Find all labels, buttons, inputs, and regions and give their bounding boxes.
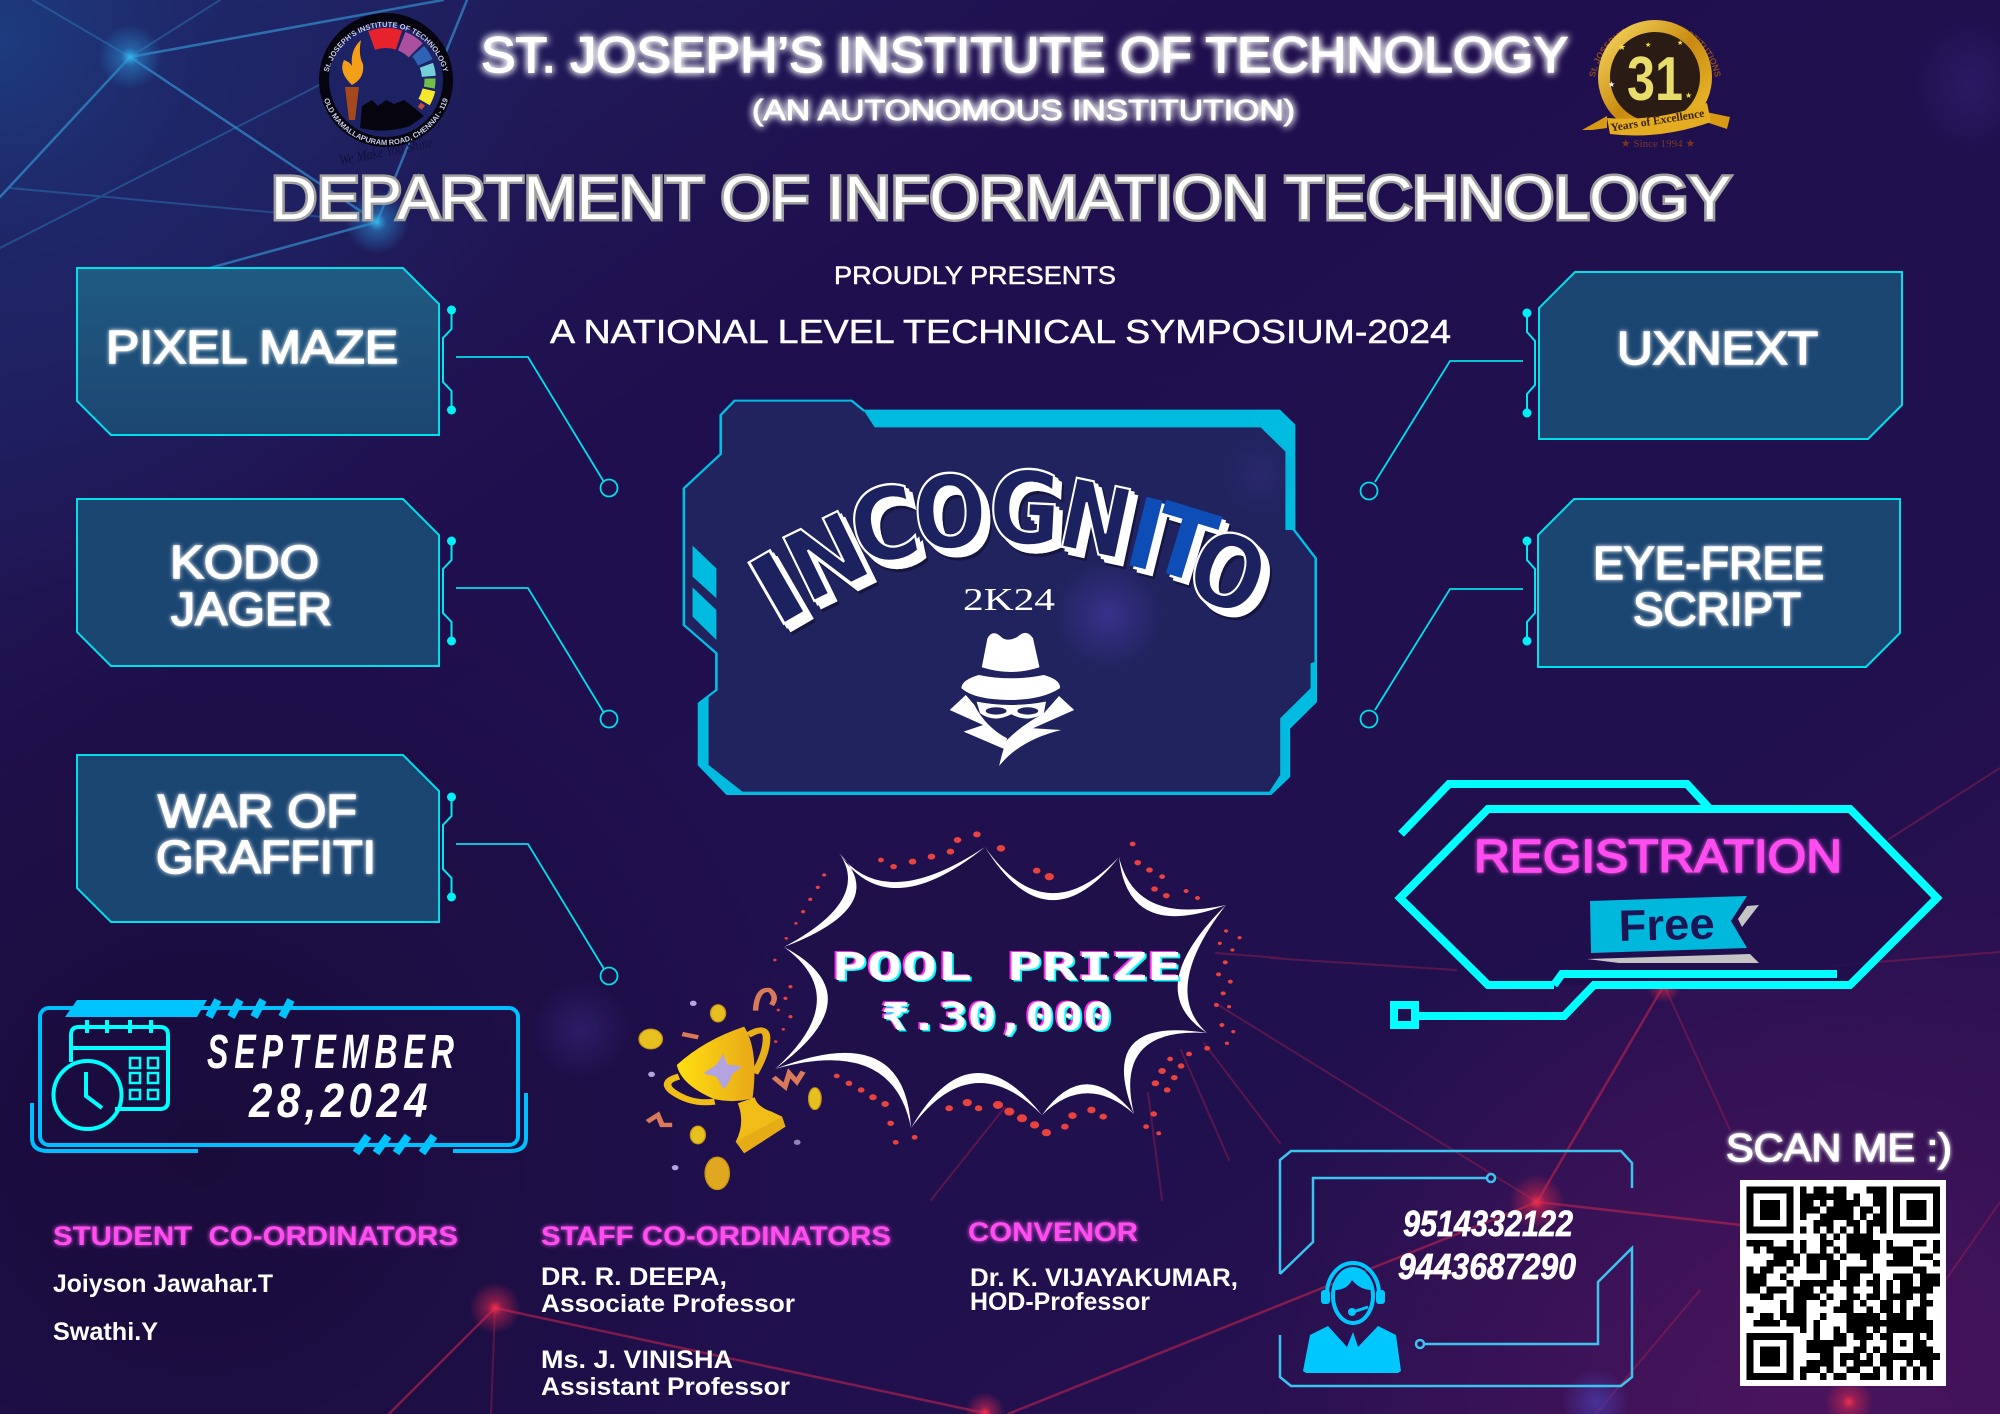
logo: 31 years badge: ★ (1685, 91, 1692, 100)
heading: scan me: SCAN ME :) (1726, 1127, 1952, 1170)
block: student co-ordinators: Swathi.Y (53, 1318, 158, 1346)
panel: Eye-Free Script: EYE-FREE (1593, 537, 1824, 589)
wordmark: INCOGNITO: C (839, 461, 930, 591)
panel: registration badge (1394, 784, 1937, 1025)
text: date month: SEPTEMBER (207, 1026, 460, 1079)
icon: spy with hat (950, 633, 1074, 766)
panel: pool prize burst (774, 832, 1241, 1144)
wordmark: INCOGNITO: N (768, 491, 886, 626)
text: prize amount: ₹.30,000 (881, 995, 1112, 1039)
block: student co-ordinators (53, 1221, 458, 1346)
ribbon: free (1587, 896, 1759, 963)
wordmark: INCOGNITO: G (986, 449, 1064, 570)
subtitle: autonomous institution: (AN AUTONOMOUS INSTITUTION) (752, 95, 1295, 127)
icon: calendar and clock (54, 1020, 168, 1129)
connector: Pixel Maze (456, 357, 618, 496)
block: convenor: HOD-Professor (970, 1288, 1150, 1316)
connector: Eye-Free Script (1360, 589, 1523, 728)
icon: trophy with coins (639, 990, 821, 1190)
heading: registration: REGISTRATION (1474, 830, 1842, 882)
panel: War of Graffiti (77, 755, 456, 922)
block: staff co-ordinators: Associate Professor (541, 1290, 795, 1318)
wordmark: INCOGNITO: N (1050, 458, 1141, 583)
panel: contact numbers (1280, 1151, 1632, 1386)
text: symposium line: A NATIONAL LEVEL TECHNICAL SYMPOSIUM-2024 (550, 313, 1451, 350)
panel: Kodo Jager: KODO (170, 536, 319, 588)
block: staff co-ordinators (541, 1221, 891, 1401)
block: convenor: Dr. K. VIJAYAKUMAR, (970, 1264, 1238, 1292)
title: institute name: ST. JOSEPH’S INSTITUTE OF TECHNOLOGY (481, 27, 1568, 83)
decorative dots (774, 832, 1241, 1144)
panel: War of Graffiti: WAR OF (158, 785, 357, 837)
logo: 31 years badge: ★ Since 1994 ★ (1621, 138, 1695, 150)
block: staff co-ordinators: DR. R. DEEPA, (541, 1263, 727, 1291)
wordmark: INCOGNITO: I (729, 528, 827, 649)
block: student co-ordinators: STUDENT CO-ORDINATORS (53, 1221, 458, 1251)
panel: event date (32, 1000, 526, 1153)
logo: 31 years badge: ★ (1618, 42, 1626, 52)
connector: Kodo Jager (456, 588, 618, 728)
burst fill (775, 847, 1226, 1128)
wordmark: INCOGNITO: O (911, 454, 989, 574)
logo: 31 years badge: ★ (1677, 39, 1683, 47)
panel: War of Graffiti: GRAFFITI (156, 831, 376, 883)
panel: UXNext: UXNEXT (1617, 322, 1818, 374)
block: staff co-ordinators: Assistant Professor (541, 1373, 790, 1401)
connector: War of Graffiti (456, 844, 618, 984)
date frame (32, 1000, 526, 1153)
icon: support agent (1303, 1263, 1401, 1373)
panel: Pixel Maze (77, 268, 456, 435)
contact frame (1280, 1151, 1632, 1386)
logo: 31 years badge: Years of Excellence (1610, 108, 1705, 134)
logo: St. Joseph's Institute emblem: We Make You Shine (338, 135, 435, 169)
logo: St. Joseph's Institute emblem: OLD MAMALLAPURAM ROAD, CHENNAI - 119 (324, 98, 448, 145)
panel: Pixel Maze: PIXEL MAZE (106, 321, 398, 373)
logo: St. Joseph's Institute emblem: St. JOSEPH'S INSTITUTE OF TECHNOLOGY (324, 22, 448, 72)
text: 2K24: 2K24 (963, 581, 1055, 617)
panel: UXNext (1522, 272, 1902, 439)
ribbon: free: Free (1618, 900, 1715, 951)
panel: central Incognito card (684, 401, 1316, 794)
logo: 31 years badge: ★ (1645, 41, 1651, 49)
text: pool prize: POOL PRIZE (832, 945, 1182, 989)
block: staff co-ordinators: STAFF CO-ORDINATORS (541, 1221, 891, 1251)
logo: 31 years badge: 31 (1627, 45, 1683, 114)
logo: 31 years badge: St. JOSEPH'S GROUP OF INSTITUTIONS (1589, 24, 1721, 77)
panel: Kodo Jager: JAGER (171, 583, 332, 635)
text: date day and year: 28,2024 (248, 1075, 432, 1128)
logo: 31 years badge: ★ (1608, 80, 1615, 89)
burst outline (775, 847, 1226, 1128)
text: phone one: 9514332122 (1403, 1203, 1573, 1244)
block: convenor: CONVENOR (968, 1217, 1138, 1247)
wordmark: INCOGNITO: I (1116, 476, 1175, 593)
block: staff co-ordinators: Ms. J. VINISHA (541, 1346, 733, 1374)
card frame (684, 401, 1316, 794)
connector: UXNext (1360, 361, 1523, 500)
qr code (1740, 1180, 1946, 1386)
frame strokes (1394, 784, 1937, 1025)
text: phone two: 9443687290 (1398, 1246, 1576, 1287)
panel: Eye-Free Script (1522, 499, 1900, 667)
heading: department: DEPARTMENT OF INFORMATION TECHNOLOGY (271, 164, 1731, 232)
logo: St. Joseph's Institute emblem (319, 13, 453, 169)
wordmark: INCOGNITO: T (1138, 481, 1229, 606)
block: student co-ordinators: Joiyson Jawahar.T (53, 1270, 273, 1298)
text: proudly presents: PROUDLY PRESENTS (834, 262, 1116, 290)
wordmark: INCOGNITO (729, 449, 1282, 649)
panel: Kodo Jager (77, 499, 456, 666)
logo: 31 years badge (1582, 20, 1730, 150)
wordmark: INCOGNITO: O (1173, 506, 1282, 641)
panel: Eye-Free Script: SCRIPT (1633, 583, 1801, 635)
block: convenor (968, 1217, 1238, 1316)
